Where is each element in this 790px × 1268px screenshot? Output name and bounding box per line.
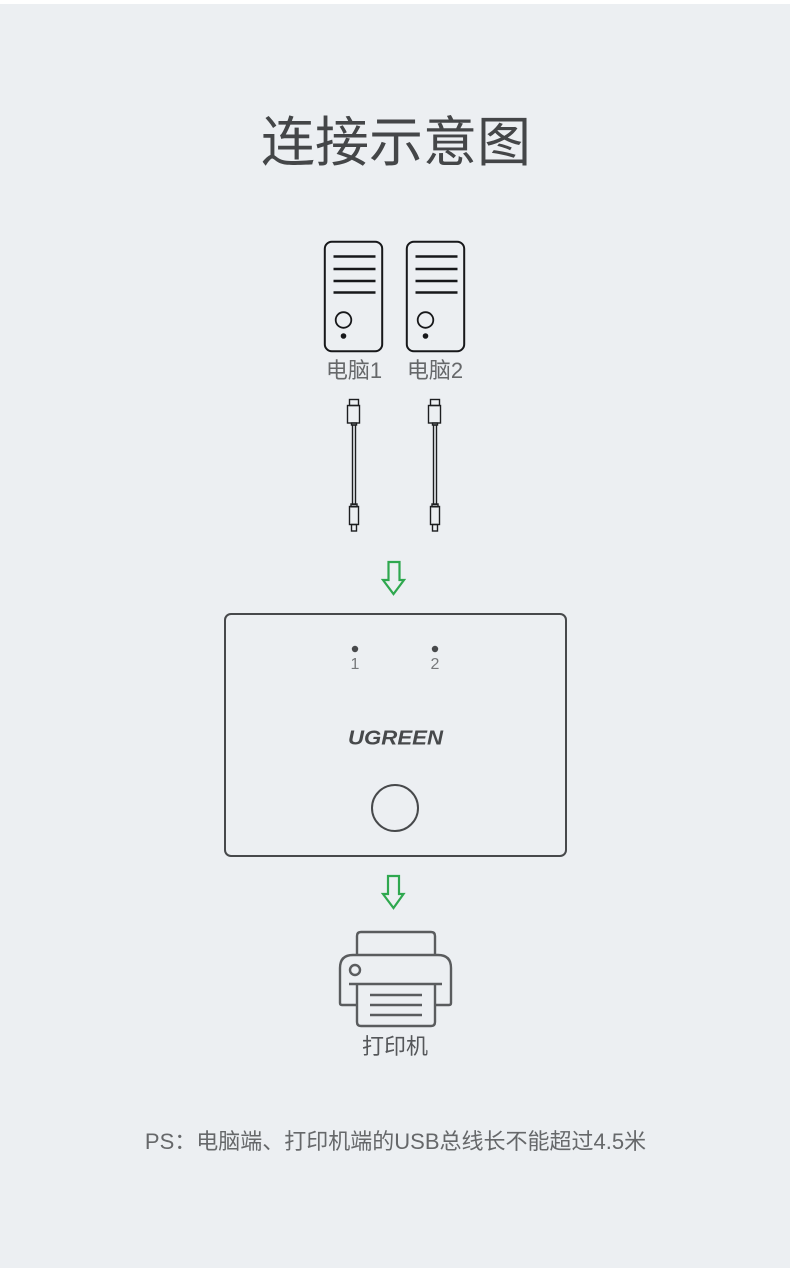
icon: USB cable 2 — [428, 400, 440, 531]
button — [372, 785, 418, 831]
logo: UGREEN: UGREEN — [348, 728, 444, 750]
icon: USB cable 1 — [348, 400, 360, 531]
note: PS：电脑端、打印机端的USB总线长不能超过4.5米 — [145, 1129, 646, 1154]
indicator 1: 1 — [351, 656, 360, 673]
arrow: switch to printer — [383, 876, 404, 908]
icon: printer — [340, 932, 451, 1026]
label: printer: 打印机 — [362, 1034, 428, 1059]
label: computer 2: 电脑2 — [407, 358, 463, 383]
indicator 1 — [351, 646, 360, 673]
arrow: cables to switch — [383, 562, 404, 594]
title: 连接示意图 — [261, 113, 531, 173]
indicator 2 — [431, 646, 440, 673]
label: computer 1: 电脑1 — [326, 358, 382, 383]
panel: USB switch — [225, 614, 566, 856]
icon: computer 2 — [407, 242, 464, 351]
indicator 2: 2 — [431, 656, 440, 673]
icon: computer 1 — [325, 242, 382, 351]
